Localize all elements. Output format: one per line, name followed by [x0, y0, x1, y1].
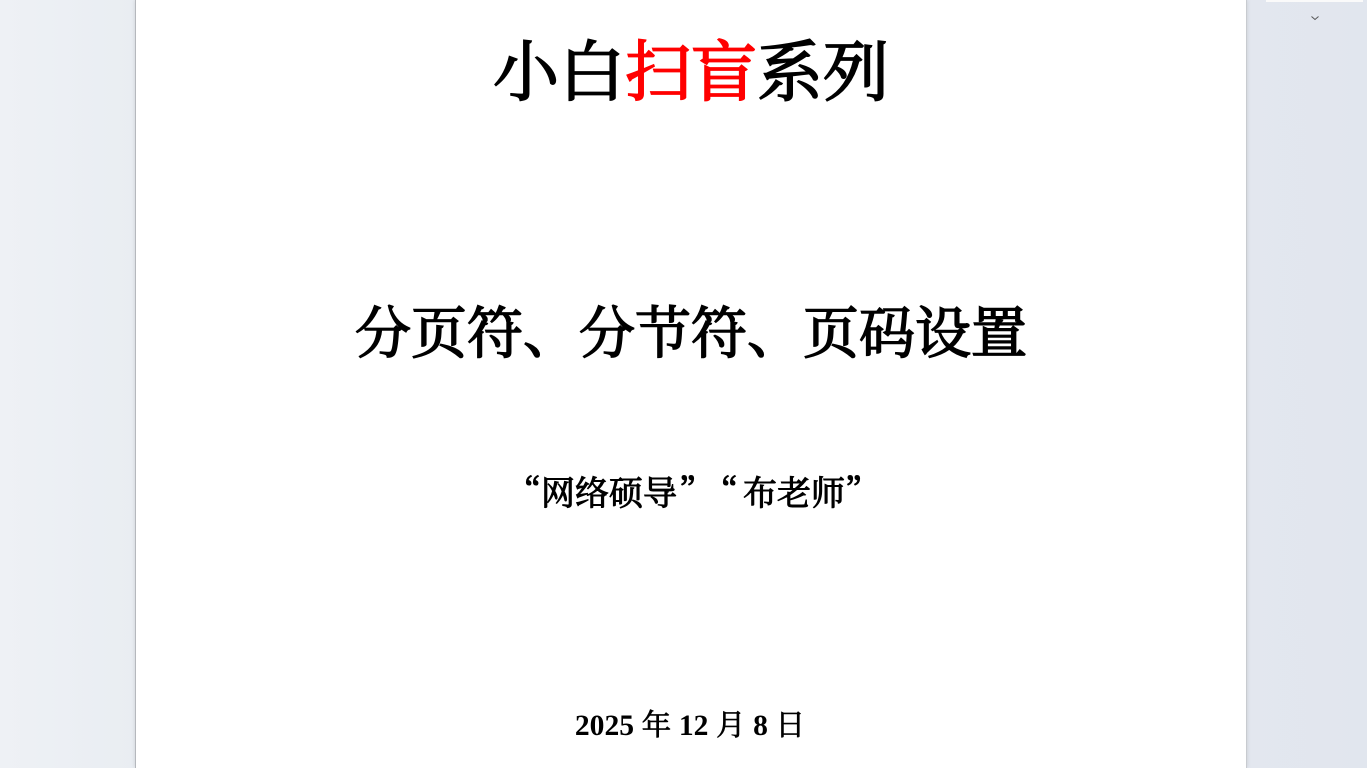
- title: 小白扫盲系列: [493, 19, 889, 114]
- icon: chevron: [1311, 16, 1319, 20]
- author: “网络硕导”“布老师”: [507, 466, 879, 515]
- date: 2025 年 12 月 8 日: [575, 702, 805, 744]
- subtitle: 分页符、分节符、页码设置: [355, 290, 1027, 370]
- toolbar tab: [1266, 0, 1363, 2]
